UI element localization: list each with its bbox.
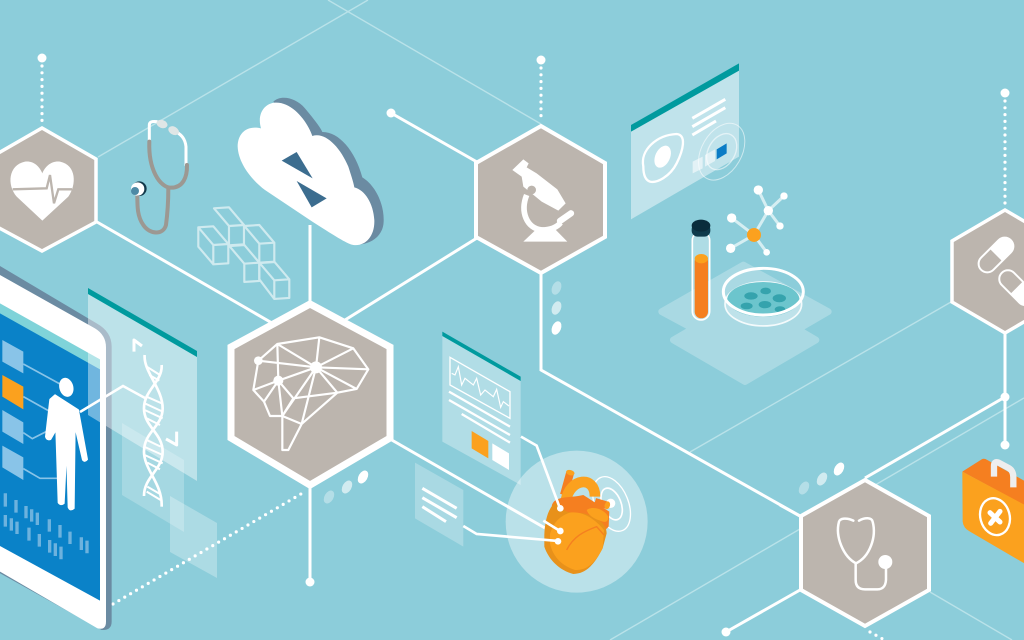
callout lines bbox=[463, 437, 560, 541]
highlighted box bbox=[2, 375, 23, 409]
tablet bbox=[0, 266, 112, 630]
icon: pills bbox=[975, 234, 1024, 309]
icon: stethoscope outline bbox=[838, 518, 892, 589]
icon: heart with pulse bbox=[10, 162, 74, 221]
hexagon: microscope bbox=[476, 126, 605, 273]
patient boxes bbox=[2, 340, 23, 480]
icon: wireframe cubes bbox=[198, 207, 289, 299]
figure: human body bbox=[46, 395, 87, 510]
icon: heart bbox=[544, 469, 611, 574]
tray plates bbox=[662, 265, 828, 382]
hexagon: pills bbox=[952, 210, 1024, 333]
panel: DNA bbox=[80, 288, 217, 578]
petri dish bbox=[723, 268, 803, 326]
data bars bbox=[5, 493, 87, 559]
icon: stethoscope bbox=[131, 118, 187, 232]
text panel bbox=[415, 463, 463, 547]
icon: cloud bbox=[238, 98, 384, 245]
panel: lab report bbox=[631, 63, 754, 219]
icon: microscope bbox=[512, 159, 571, 242]
connector: body to DNA bbox=[80, 386, 145, 412]
test tube bbox=[692, 220, 710, 320]
box connectors bbox=[23, 364, 60, 478]
icon: first aid case bbox=[962, 459, 1024, 567]
icon: DNA helix bbox=[134, 340, 177, 507]
connector lines bbox=[97, 113, 1005, 632]
hexagon: brain bbox=[231, 304, 390, 485]
hexagon: stethoscope bbox=[801, 480, 929, 626]
hexagon: heart bbox=[0, 128, 96, 251]
progress dots bbox=[322, 280, 846, 505]
icon: polygon brain bbox=[253, 337, 368, 450]
lab equipment bbox=[662, 185, 828, 382]
panel: heart analysis bbox=[415, 332, 648, 593]
molecule bbox=[726, 185, 788, 256]
target rings bbox=[585, 471, 638, 537]
ECG report bbox=[442, 332, 521, 485]
